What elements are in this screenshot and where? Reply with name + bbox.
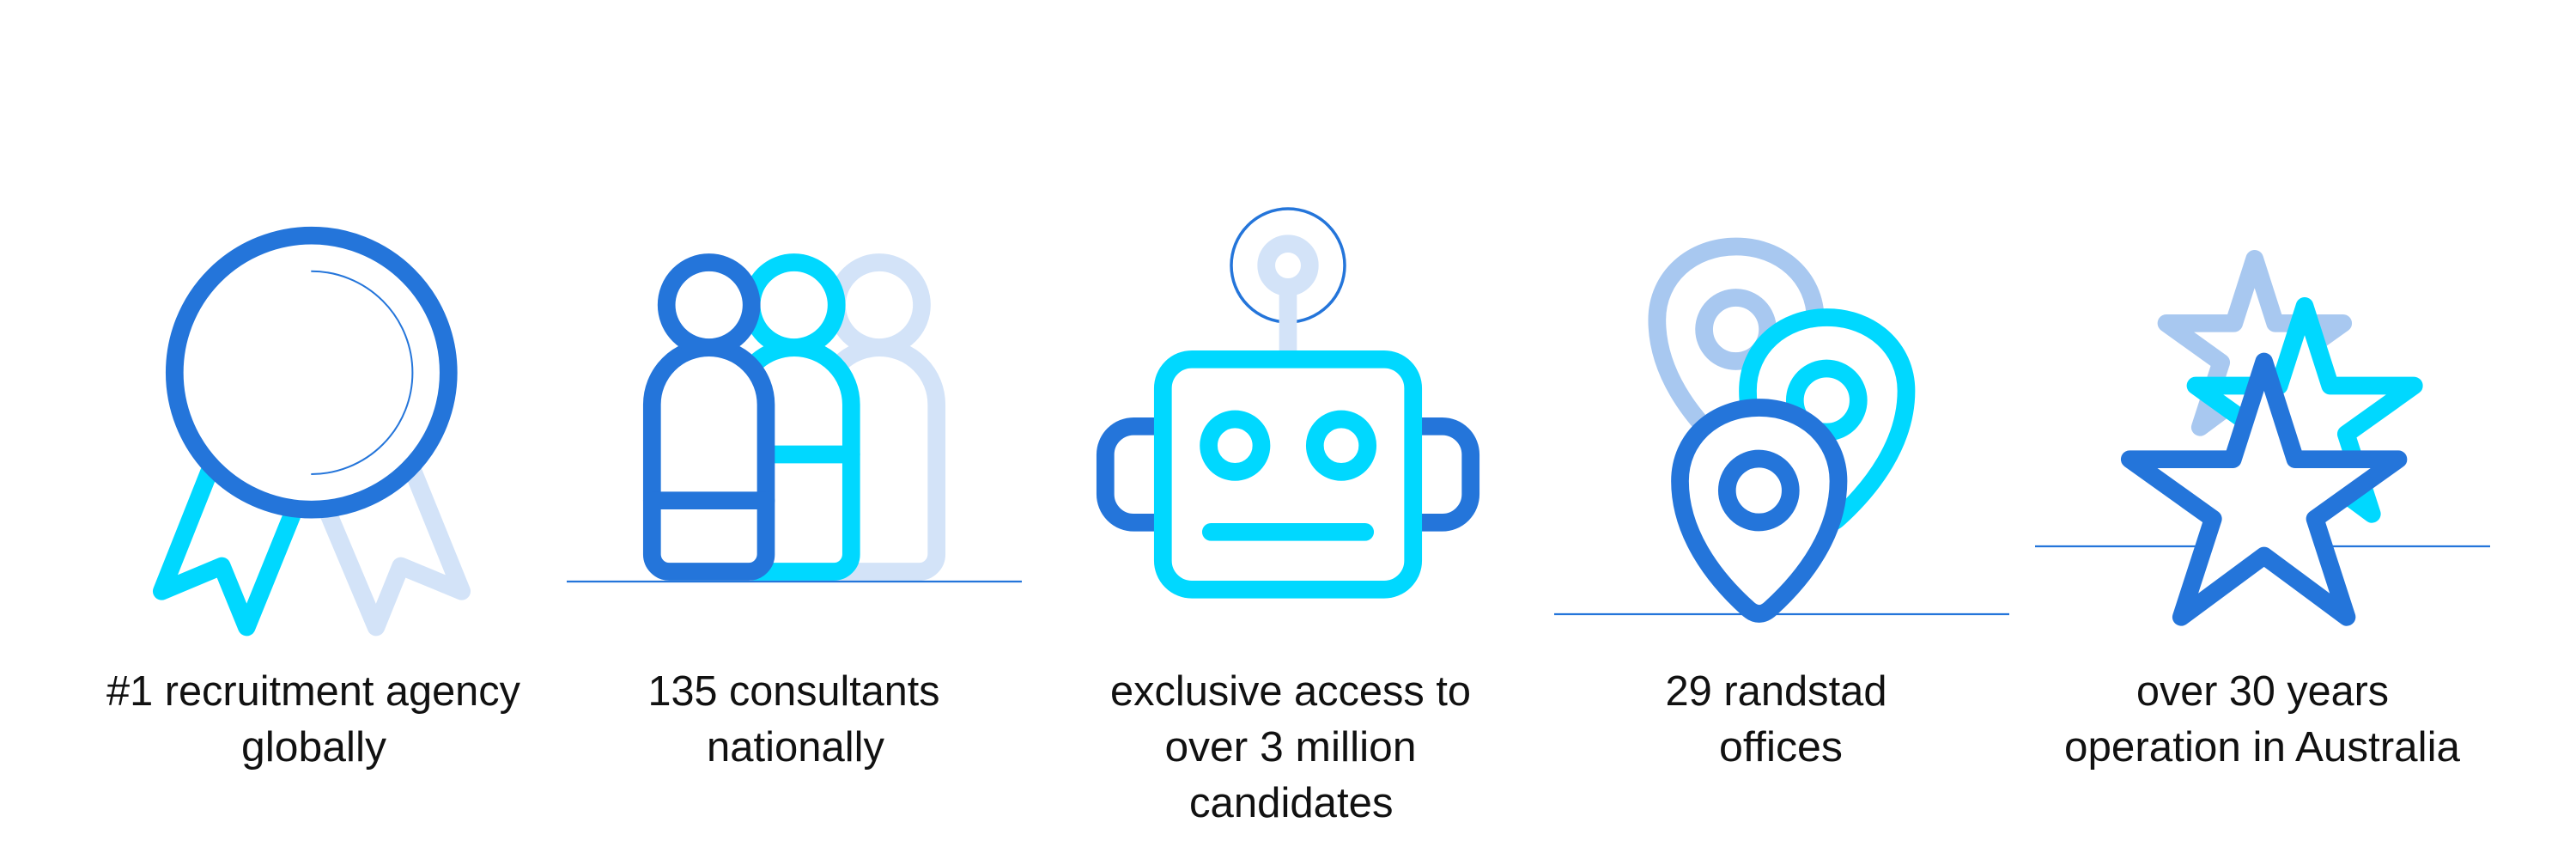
- baseline rule: [2035, 545, 2490, 547]
- text: years of operation: over 30 years: [2136, 668, 2389, 715]
- text: offices: 29 randstad: [1666, 668, 1887, 715]
- icon: three people: [652, 263, 937, 572]
- text: recruitment agency: globally: [241, 724, 387, 771]
- icon: robot: [1105, 209, 1471, 589]
- text: recruitment agency: #1 recruitment agency: [106, 668, 520, 715]
- text: offices: offices: [1719, 724, 1843, 771]
- panel: consultants: [567, 263, 1022, 771]
- baseline rule: [567, 581, 1022, 582]
- icon: map pins: [1657, 247, 1906, 613]
- text: consultants: 135 consultants: [647, 668, 939, 715]
- text: consultants: nationally: [707, 724, 884, 771]
- panel: years of operation: [2035, 259, 2490, 771]
- baseline rule: [1554, 613, 2009, 615]
- text: candidates: over 3 million: [1164, 724, 1417, 771]
- icon: three stars: [2129, 259, 2414, 617]
- panel: recruitment agency: [106, 235, 532, 771]
- panel: offices: [1554, 247, 2009, 771]
- text: years of operation: operation in Australia: [2064, 724, 2461, 771]
- panel: candidates: [1105, 209, 1483, 826]
- text: candidates: exclusive access to: [1110, 668, 1471, 715]
- icon: medal: [161, 235, 462, 627]
- text: candidates: candidates: [1189, 780, 1393, 826]
